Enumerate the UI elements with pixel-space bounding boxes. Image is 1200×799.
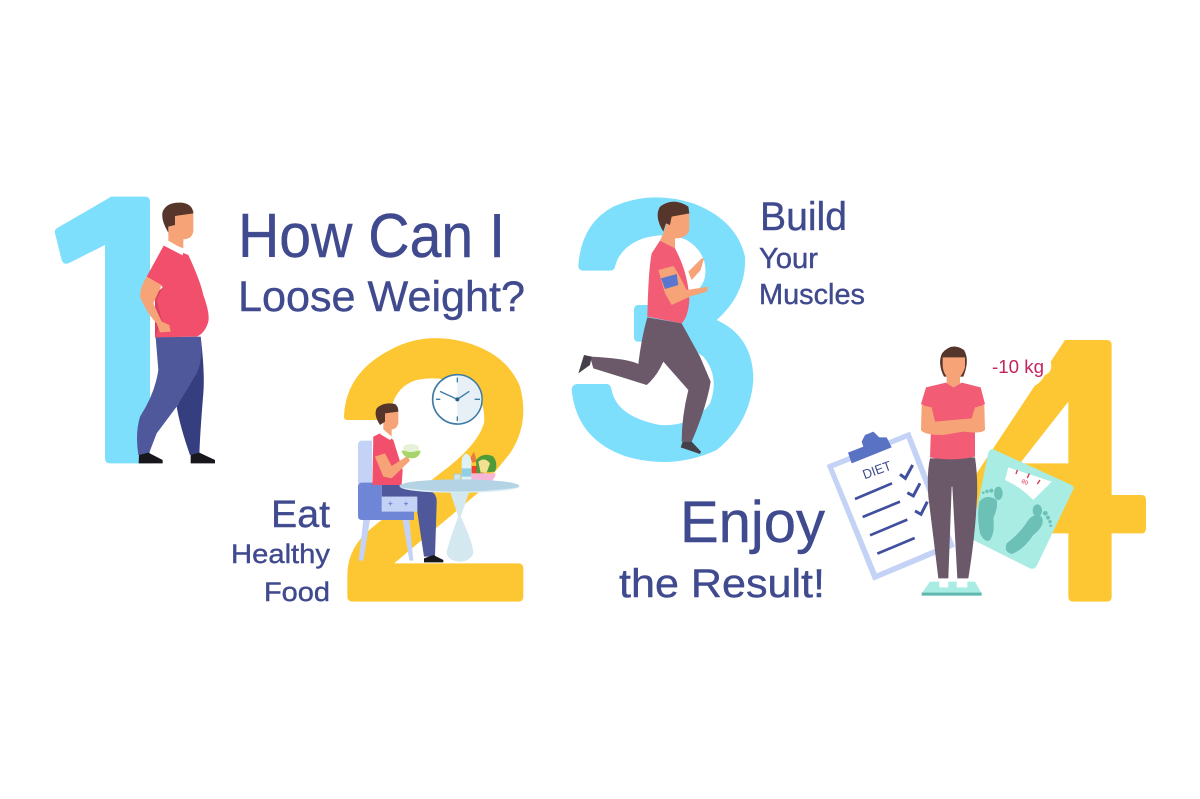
heading: Loose Weight?: Loose Weight? [238,273,525,321]
white notch behind weight label [987,350,1053,390]
numeral 1 [55,197,150,463]
icon: wall clock [433,375,482,424]
label: minus 10 kg: -10 kg [992,357,1044,377]
icon: diet clipboard [827,432,955,581]
table with food [399,452,519,562]
numeral 3 [572,197,753,462]
numeral 4 [977,340,1146,602]
figure: overweight man [137,203,215,463]
heading: Enjoy: Enjoy [680,490,825,555]
text: Muscles: Muscles [759,279,865,311]
numeral 2 [344,338,523,602]
icon: bathroom scale: 80 [1020,479,1029,487]
text: Eat: Eat [271,494,330,536]
figure: running man [578,202,711,454]
figure: man eating, lower body [382,484,437,557]
panel: step 2 [344,338,523,602]
text: Healthy: Healthy [231,539,331,569]
icon: chair [358,441,417,561]
text: Your: Your [759,243,818,275]
figure: slim man on scale [921,347,985,596]
heading: the Result!: the Result! [619,562,825,606]
figure: man eating, upper body [372,403,443,562]
heading: How Can I: How Can I [238,202,505,271]
icon: diet clipboard: DIET [861,458,893,482]
panel: step 1 [55,197,215,463]
text: Build: Build [760,195,847,239]
panel: step 4 [827,340,1146,602]
text: Food: Food [264,577,330,607]
icon: bathroom scale [971,449,1074,569]
panel: step 3 [572,197,753,462]
